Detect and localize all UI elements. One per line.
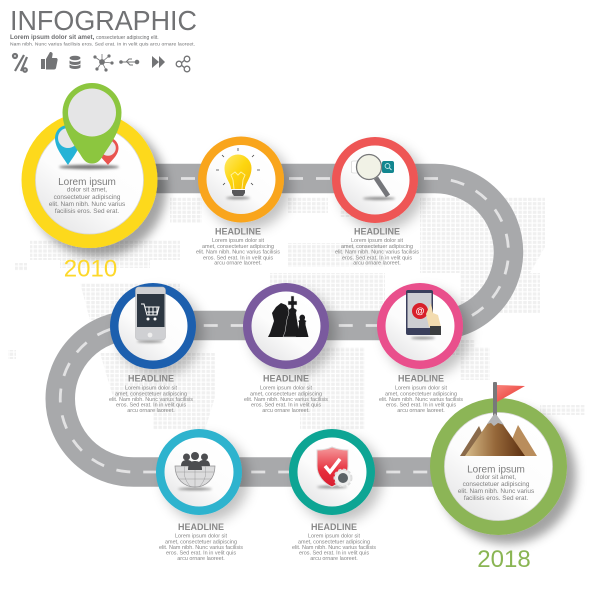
icon: tools	[13, 54, 27, 72]
body: eros. Sed erat. In in velit quis	[203, 255, 273, 261]
body: Lorem ipsum dolor sit	[395, 386, 447, 392]
ring	[289, 429, 375, 515]
body	[109, 386, 193, 414]
text: Lorem ipsum	[467, 464, 525, 476]
icon: share	[176, 56, 190, 72]
text	[458, 464, 534, 502]
body: amet, consectetuer adipiscing	[202, 244, 274, 250]
body	[292, 534, 376, 562]
body: amet, consectetuer adipiscing	[341, 244, 413, 250]
text: elit. Nam nibh. Nunc varius	[49, 201, 125, 208]
icon: usb	[120, 59, 139, 65]
body: Lorem ipsum dolor sit	[175, 534, 227, 540]
white disc	[36, 126, 144, 234]
icon: phone with cart	[136, 287, 166, 343]
subtitle	[10, 34, 195, 48]
panel: bulb step	[196, 136, 284, 267]
subtitle: Nam nibh. Nunc varius facilisis eros. Sed erat. In in velit quis arcu ornare laoreet.	[10, 42, 195, 48]
text: Lorem ipsum	[58, 177, 116, 188]
body: eros. Sed erat. In in velit quis	[166, 551, 236, 557]
icon: people on globe	[175, 452, 215, 490]
text: dolor sit amet,	[67, 186, 107, 194]
panel: search step	[332, 137, 419, 267]
year: 2010	[64, 256, 117, 282]
body: arcu ornare laoreet.	[310, 556, 358, 562]
text: facilisis eros. Sed erat.	[55, 208, 119, 215]
panel: shopping step	[109, 283, 196, 414]
body: eros. Sed erat. In in velit quis	[299, 551, 369, 557]
title: INFOGRAPHIC	[10, 5, 197, 36]
body: elit. Nam nibh. Nunc varius facilisis	[335, 250, 419, 256]
icon: database	[70, 56, 80, 69]
text: facilisis eros. Sed erat.	[464, 495, 528, 502]
icon: magnifier	[352, 154, 395, 200]
body: amet, consectetuer adipiscing	[165, 540, 237, 546]
icon row	[13, 52, 190, 72]
icon: thumbs up	[41, 52, 58, 70]
body: amet, consectetuer adipiscing	[298, 540, 370, 546]
icon: tablet with hand: @	[416, 306, 425, 316]
pin shadow	[59, 165, 119, 169]
body	[244, 386, 328, 414]
icon: network	[94, 54, 113, 71]
icon: green pin	[62, 83, 122, 164]
headline: HEADLINE	[354, 226, 400, 236]
body: amet, consectetuer adipiscing	[250, 392, 322, 398]
panel: people globe step	[156, 429, 243, 562]
panel: chess step	[243, 283, 329, 414]
icon: blue pin	[55, 125, 81, 165]
ring	[377, 283, 463, 369]
icon: mountains	[460, 413, 537, 456]
year: 2018	[477, 546, 531, 573]
body: Lorem ipsum dolor sit	[260, 386, 312, 392]
headline: HEADLINE	[128, 374, 174, 384]
body: elit. Nam nibh. Nunc varius facilisis	[109, 397, 193, 403]
body: arcu ornare laoreet.	[353, 261, 401, 267]
dotted world map background	[8, 197, 585, 430]
text	[49, 177, 125, 215]
body: eros. Sed erat. In in velit quis	[116, 403, 186, 409]
ring	[110, 283, 196, 369]
ring	[243, 283, 329, 369]
body: elit. Nam nibh. Nunc varius facilisis	[379, 397, 463, 403]
body: amet, consectetuer adipiscing	[115, 392, 187, 398]
body: Lorem ipsum dolor sit	[308, 534, 360, 540]
subtitle: Lorem ipsum dolor sit amet, consectetuer adipiscing elit.	[10, 34, 159, 41]
headline: HEADLINE	[311, 522, 357, 532]
green ring	[430, 398, 567, 535]
body: arcu ornare laoreet.	[127, 408, 175, 414]
body: elit. Nam nibh. Nunc varius facilisis	[196, 250, 280, 256]
body: eros. Sed erat. In in velit quis	[251, 403, 321, 409]
body: arcu ornare laoreet.	[177, 556, 225, 562]
body: arcu ornare laoreet.	[397, 408, 445, 414]
body: amet, consectetuer adipiscing	[385, 392, 457, 398]
ring	[332, 137, 418, 223]
headline: HEADLINE	[215, 226, 261, 236]
icon: flag	[493, 382, 525, 418]
body: arcu ornare laoreet.	[214, 261, 262, 267]
road	[60, 178, 508, 472]
body: eros. Sed erat. In in velit quis	[342, 255, 412, 261]
panel: 2018 finish	[430, 382, 567, 573]
body: Lorem ipsum dolor sit	[125, 386, 177, 392]
body	[196, 238, 280, 267]
panel: mobile tablet step	[377, 283, 463, 414]
body	[379, 386, 463, 414]
headline: HEADLINE	[263, 374, 309, 384]
body: elit. Nam nibh. Nunc varius facilisis	[159, 545, 243, 551]
body	[335, 238, 419, 267]
icon: light bulb	[216, 148, 260, 199]
headline: HEADLINE	[178, 522, 224, 532]
text: elit. Nam nibh. Nunc varius	[458, 488, 534, 495]
panel: 2010 start	[22, 83, 158, 282]
white disc	[444, 412, 552, 520]
body	[159, 534, 243, 562]
icon: shield with check and gear	[317, 447, 352, 488]
icon: fast forward	[152, 56, 165, 68]
panel: shield step	[289, 429, 376, 562]
icon: chess pieces	[268, 296, 308, 337]
icon: red pin	[98, 138, 118, 165]
body: eros. Sed erat. In in velit quis	[386, 403, 456, 409]
body: elit. Nam nibh. Nunc varius facilisis	[292, 545, 376, 551]
text: consectetuer adipiscing	[463, 481, 530, 488]
text: dolor sit amet,	[476, 474, 516, 481]
yellow ring	[22, 112, 158, 248]
body: arcu ornare laoreet.	[262, 408, 310, 414]
body: Lorem ipsum dolor sit	[351, 238, 403, 244]
body: Lorem ipsum dolor sit	[212, 238, 264, 244]
text: consectetuer adipiscing	[54, 194, 121, 201]
headline: HEADLINE	[398, 374, 444, 384]
body: elit. Nam nibh. Nunc varius facilisis	[244, 397, 328, 403]
ring	[198, 136, 284, 222]
ring	[156, 429, 242, 515]
